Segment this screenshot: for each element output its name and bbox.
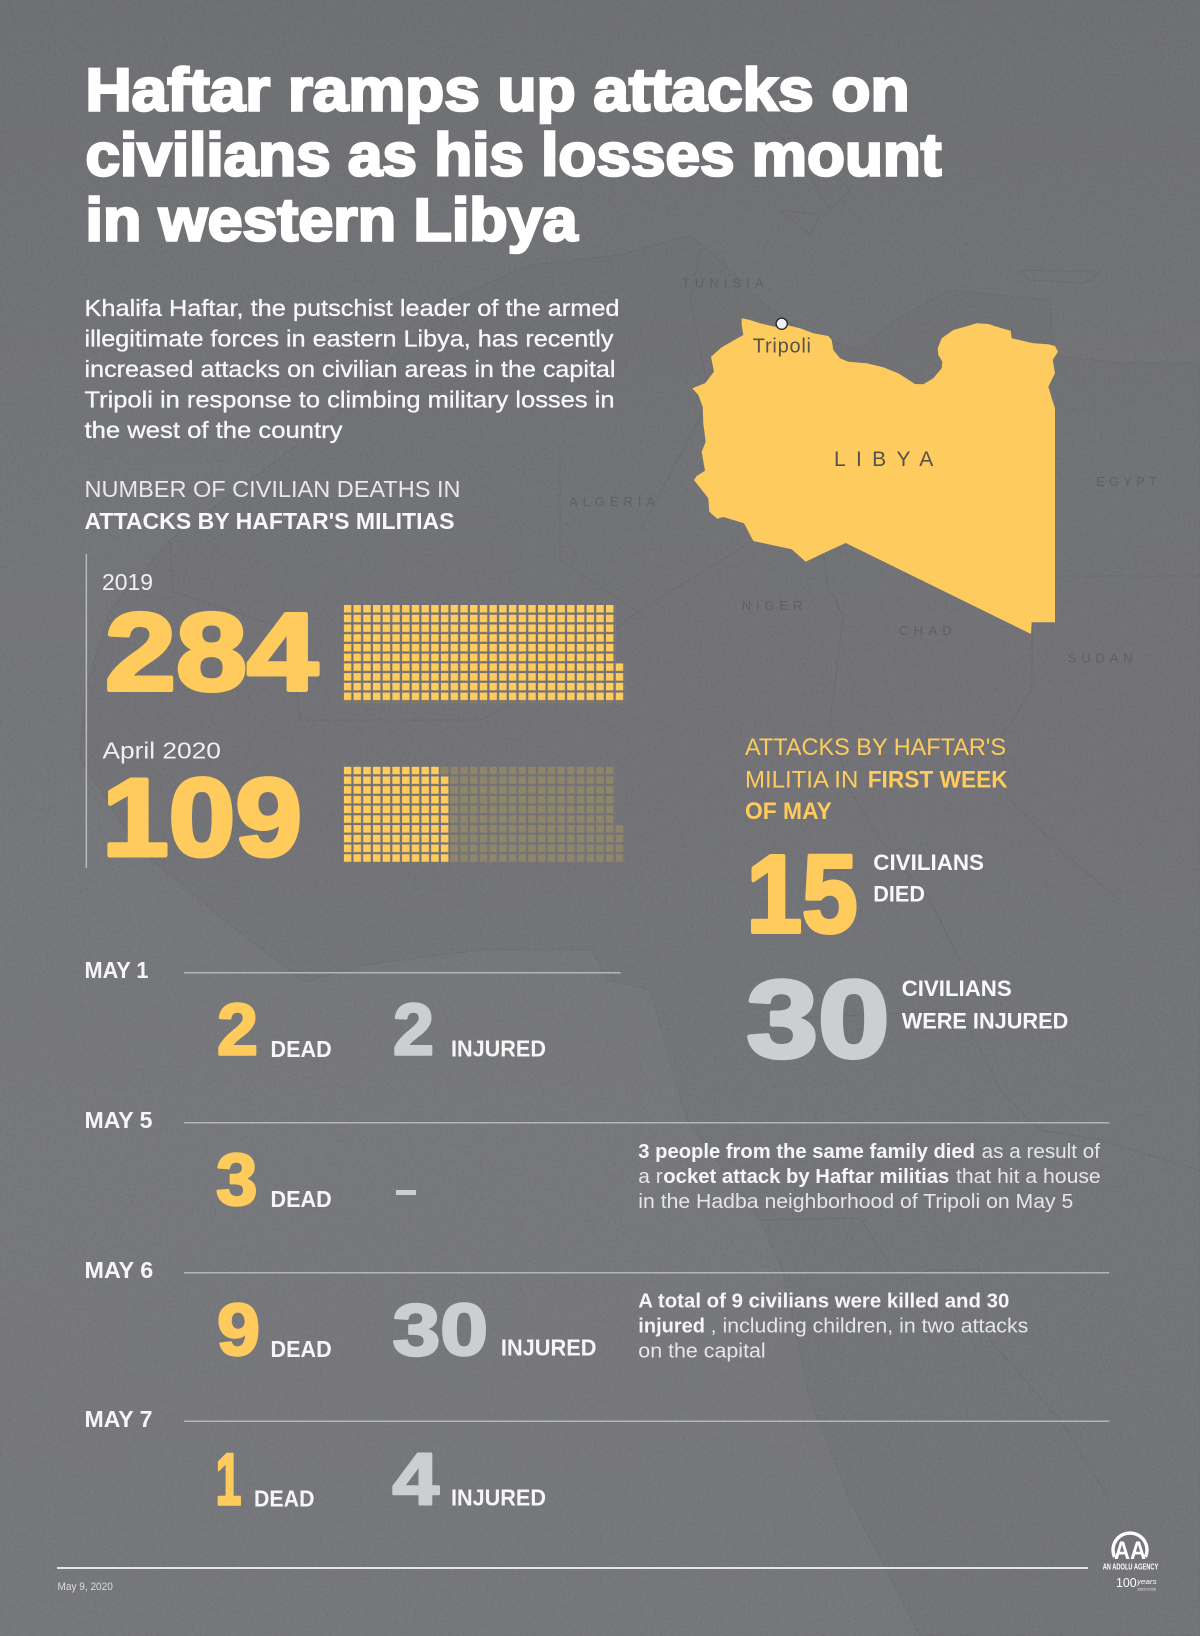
logo: Anadolu Agency: AN ADOLU AGENCY	[1103, 1562, 1159, 1572]
label: April 2020: April 2020	[102, 737, 221, 763]
Tripoli marker	[776, 318, 787, 329]
Tripoli label: Tripoli	[753, 335, 811, 357]
heading	[745, 734, 1008, 825]
date: MAY 5	[84, 1107, 153, 1133]
stat: 15 civilians died: DIED	[873, 882, 925, 907]
panel: first week of May summary	[745, 734, 1068, 1081]
neighbouring country labels: CHAD	[899, 623, 952, 638]
title: Haftar ramps up attacks on	[86, 56, 910, 124]
logo: Anadolu Agency	[1103, 1533, 1159, 1592]
injured count: INJURED	[451, 1484, 546, 1510]
intro text block: illegitimate forces in eastern Libya, has recently	[84, 326, 614, 352]
date: MAY 6	[84, 1257, 153, 1283]
Libya shape	[692, 318, 1058, 634]
neighbouring country labels	[569, 276, 1157, 666]
injured count: 30	[392, 1290, 488, 1371]
dead count	[217, 1290, 332, 1371]
date: MAY 7	[84, 1406, 152, 1432]
timeline row: May 1	[84, 957, 621, 1070]
neighbouring country labels: SUDAN	[1068, 651, 1133, 666]
neighbouring country labels: EGYPT	[1096, 474, 1157, 489]
dead count: 2	[217, 990, 258, 1070]
injured count: 4	[392, 1440, 439, 1520]
description: , including children, in two attacks	[711, 1316, 1028, 1338]
logo: Anadolu Agency: 1920-2020	[1137, 1587, 1157, 1592]
dead count	[217, 990, 332, 1070]
description: that hit a house	[956, 1166, 1101, 1188]
heading: MILITIA IN	[745, 766, 858, 793]
stat: 30 civilians injured	[746, 958, 1068, 1081]
date stamp: May 9, 2020	[58, 1581, 113, 1593]
stat: 30 civilians injured: CIVILIANS	[902, 976, 1012, 1001]
description: A total of 9 civilians were killed and 30	[638, 1290, 1009, 1312]
stat: 15 civilians died: CIVILIANS	[873, 850, 984, 875]
panel: 2019 deaths	[102, 569, 625, 714]
dead count: 1	[216, 1440, 242, 1520]
vertical rule	[86, 554, 87, 868]
footer rule	[57, 1567, 1088, 1569]
section heading: civilian deaths: ATTACKS BY HAFTAR'S MILITIAS	[84, 508, 454, 534]
panel: April 2020 deaths	[102, 737, 625, 880]
label: 2019: 2019	[102, 569, 153, 595]
injured count: 2	[393, 990, 434, 1070]
description: 3 people from the same family died	[638, 1141, 975, 1163]
description	[638, 1141, 1101, 1213]
description: in the Hadba neighborhood of Tripoli on May 5	[638, 1191, 1073, 1213]
dead count: DEAD	[270, 1186, 332, 1212]
neighbouring country labels: TUNISIA	[682, 276, 764, 291]
title: in western Libya	[86, 186, 578, 254]
waffle chart: 109 of 284 squares	[344, 767, 625, 864]
intro text block	[84, 295, 620, 443]
intro text block: Tripoli in response to climbing military losses in	[84, 386, 614, 412]
dead count: DEAD	[254, 1486, 314, 1512]
map: Libya	[692, 318, 1058, 634]
heading: OF MAY	[745, 798, 832, 825]
injured count: INJURED	[451, 1036, 546, 1062]
description: on the capital	[638, 1340, 766, 1362]
injured count	[392, 1290, 596, 1371]
heading: ATTACKS BY HAFTAR'S	[745, 734, 1006, 761]
title: civilians as his losses mount	[86, 122, 942, 188]
logo: Anadolu Agency: AA	[1114, 1537, 1146, 1565]
description: a r	[638, 1166, 663, 1188]
date: MAY 1	[84, 957, 149, 983]
neighbouring country labels: NIGER	[742, 598, 802, 613]
injured count	[392, 1440, 546, 1520]
stat: 15 civilians died	[746, 833, 984, 956]
intro text block: Khalifa Haftar, the putschist leader of the armed	[84, 295, 620, 321]
injured count: INJURED	[501, 1334, 596, 1360]
description: as a result of	[982, 1141, 1100, 1163]
description: ocket attack by Haftar militias	[663, 1166, 949, 1188]
no injured dash	[396, 1190, 416, 1195]
timeline row: May 6	[84, 1257, 1109, 1371]
neighbouring country labels: ALGERIA	[569, 494, 655, 509]
stat: 30 civilians injured: 30	[746, 958, 890, 1081]
intro text block: increased attacks on civilian areas in the capital	[84, 356, 616, 382]
stat: 30 civilians injured: WERE INJURED	[902, 1008, 1068, 1033]
Libya label: LIBYA	[834, 448, 933, 471]
logo: Anadolu Agency: years	[1136, 1577, 1157, 1586]
dead count: 3	[216, 1140, 258, 1220]
timeline row: May 5	[84, 1107, 1109, 1220]
stat: 15 civilians died: 15	[746, 833, 858, 956]
injured count	[393, 990, 546, 1070]
description: injured	[638, 1316, 705, 1338]
dead count: DEAD	[270, 1036, 332, 1062]
dead count	[216, 1140, 332, 1220]
timeline row: May 7	[84, 1406, 1109, 1520]
description	[638, 1290, 1028, 1362]
section heading: civilian deaths	[84, 476, 460, 534]
section heading: civilian deaths: NUMBER OF CIVILIAN DEATHS IN	[84, 476, 460, 502]
number: 284: 284	[105, 591, 318, 714]
intro text block: the west of the country	[84, 417, 343, 443]
dead count: DEAD	[270, 1336, 332, 1362]
title	[86, 56, 942, 254]
logo: Anadolu Agency: 100	[1116, 1575, 1137, 1590]
dead count	[216, 1440, 314, 1520]
heading: FIRST WEEK	[868, 766, 1008, 793]
dead count: 9	[217, 1290, 260, 1371]
number: 109: 109	[102, 756, 302, 880]
waffle chart: 284 squares	[344, 605, 625, 702]
